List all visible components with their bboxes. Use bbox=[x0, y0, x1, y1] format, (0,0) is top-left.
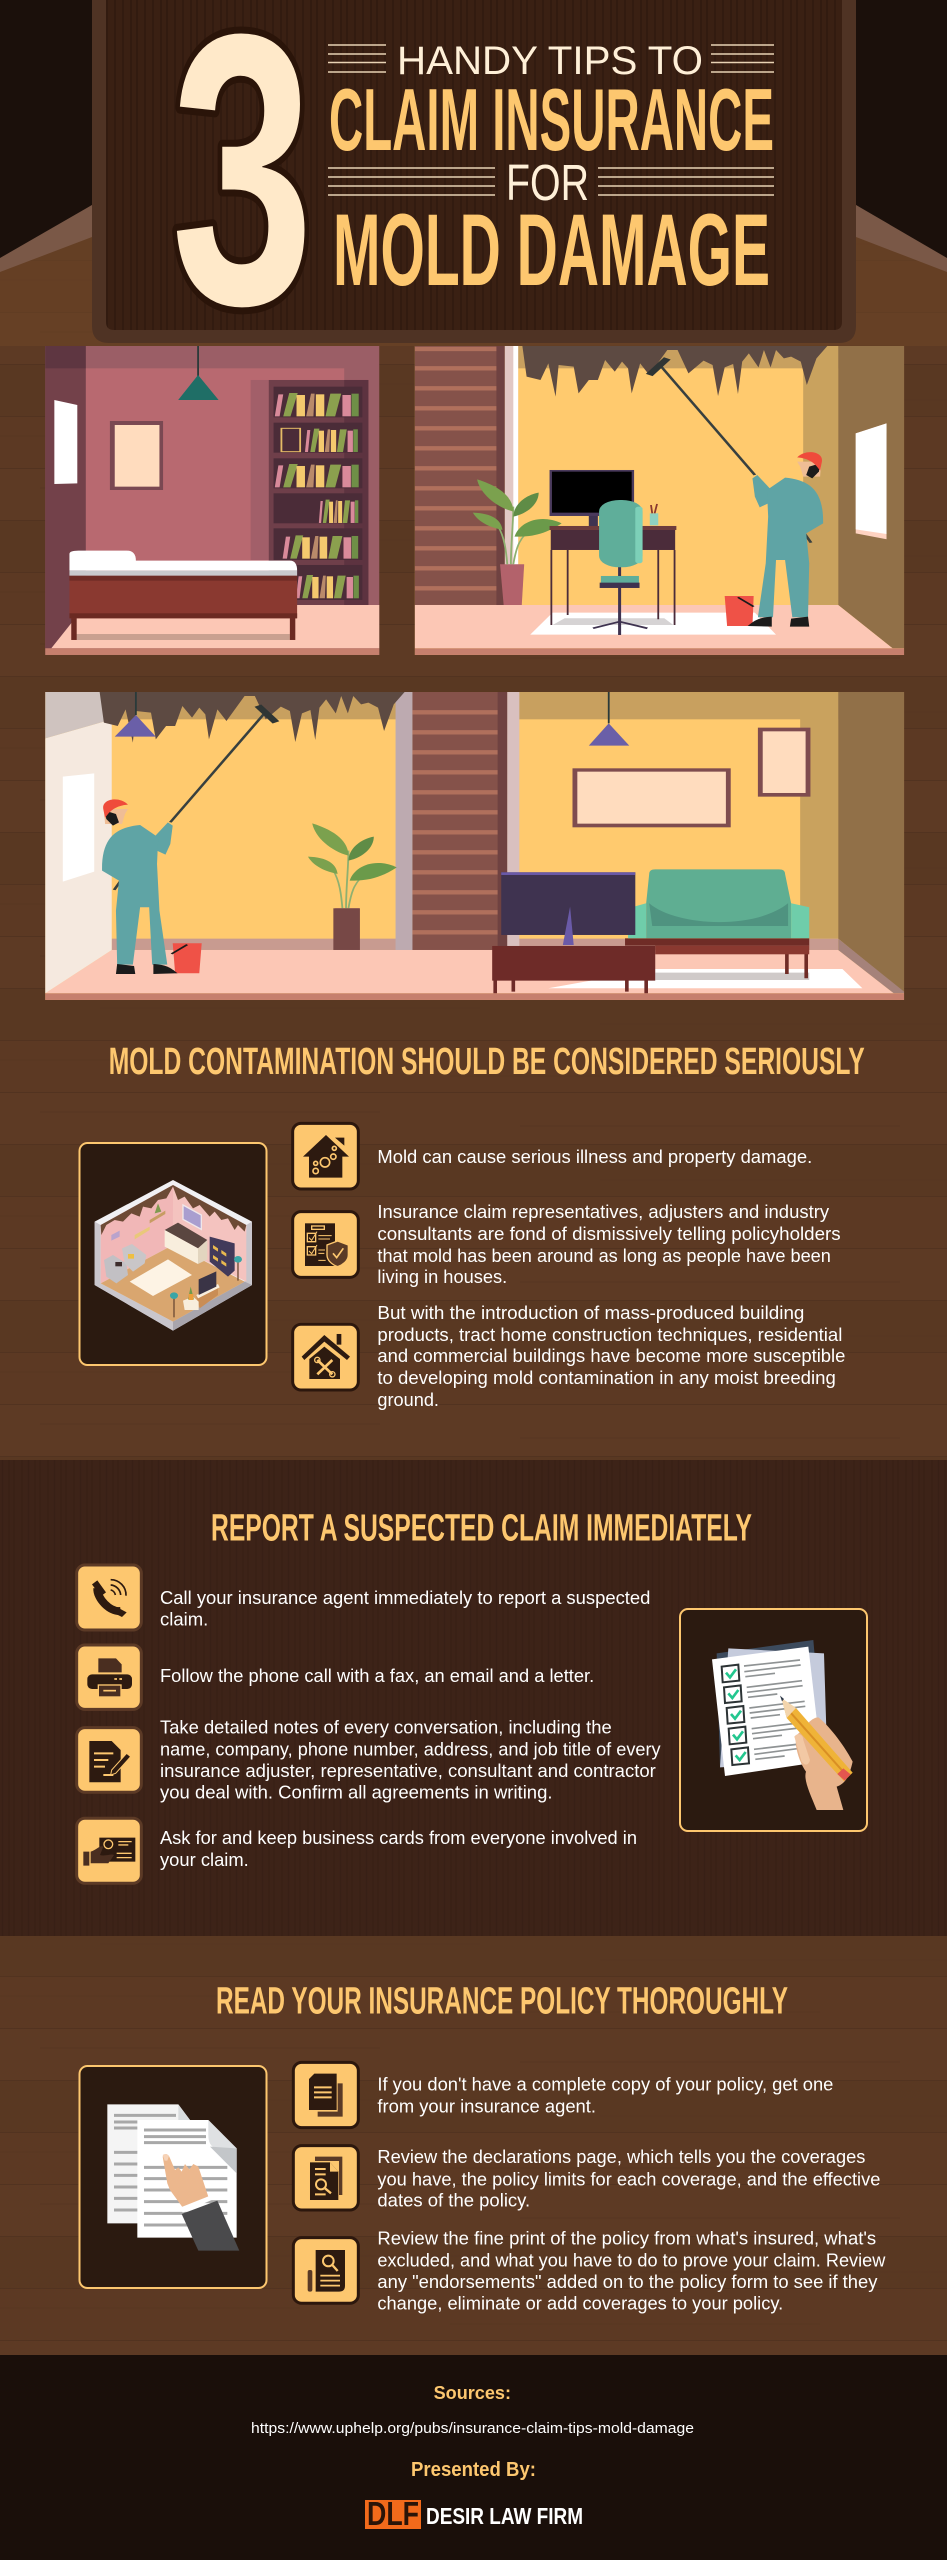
text: section 2: Ask for and keep business cards from everyone involved in bbox=[160, 1828, 637, 1848]
rug bbox=[530, 613, 776, 635]
logo: Desir Law Firm bbox=[365, 2495, 583, 2532]
text: section 2: your claim. bbox=[160, 1850, 249, 1870]
lamp bbox=[178, 346, 219, 400]
text: section 3: you have, the policy limits for each coverage, and the effective bbox=[377, 2169, 880, 2189]
illustration: checklist with pencil and hand bbox=[712, 1640, 853, 1810]
text: section 1: and commercial buildings have become more susceptible bbox=[377, 1346, 845, 1366]
text: section 1: products, tract home construction techniques, residential bbox=[377, 1325, 842, 1345]
footer: sources: Presented By: bbox=[411, 2459, 536, 2481]
logo: Desir Law Firm: DESIR LAW FIRM bbox=[426, 2503, 583, 2529]
illustration: office with worker bbox=[415, 346, 904, 655]
icons: section 1 bbox=[293, 1123, 358, 1390]
text: section 2: insurance adjuster, representative, consultant and contractor bbox=[160, 1761, 656, 1781]
footer: sources bbox=[251, 2383, 694, 2481]
ceiling mold bbox=[100, 692, 405, 743]
icon: moldy house bbox=[293, 1123, 358, 1189]
worker with roller bbox=[649, 358, 823, 627]
icon: fine print search bbox=[293, 2238, 358, 2303]
sofa bbox=[625, 869, 809, 978]
lamp right bbox=[589, 692, 629, 746]
text: section 3: If you don't have a complete copy of your policy, get one bbox=[377, 2075, 833, 2095]
icons: section 2 bbox=[77, 1565, 141, 1883]
icon: house and tools bbox=[293, 1324, 358, 1390]
bed bbox=[69, 551, 297, 640]
panel: isometric room bbox=[80, 1143, 266, 1365]
text: section 1: to developing mold contamination in any moist breeding bbox=[377, 1368, 836, 1388]
icon: checklist and shield bbox=[293, 1212, 358, 1277]
text: section 1: But with the introduction of mass-produced building bbox=[377, 1303, 804, 1323]
title line: for bbox=[328, 154, 774, 211]
text: section 3: excluded, and what you have to do to prove your claim. Review bbox=[377, 2250, 886, 2270]
icon: notes and pen bbox=[77, 1728, 141, 1792]
text: section 2: name, company, phone number, address, and job title of every bbox=[160, 1739, 661, 1759]
text: section 1: consultants are fond of dismissively telling policyholders bbox=[377, 1224, 841, 1244]
bookcase bbox=[251, 380, 368, 605]
window bbox=[856, 423, 887, 539]
tv on cabinet bbox=[492, 872, 655, 993]
text: section 3: change, eliminate or add coverages to your policy. bbox=[377, 2294, 783, 2314]
text: section 1: Insurance claim representatives, adjusters and industry bbox=[377, 1202, 829, 1222]
icon: declarations search bbox=[293, 2146, 358, 2210]
header board bbox=[92, 0, 856, 385]
illustration: isometric moldy room bbox=[95, 1180, 252, 1331]
text: section 3: Review the declarations page, which tells you the coverages bbox=[377, 2147, 865, 2167]
plant bbox=[473, 479, 562, 605]
text: section 2: Call your insurance agent immediately to report a suspected bbox=[160, 1588, 650, 1608]
text: section 1: living in houses. bbox=[377, 1267, 507, 1287]
title line: handy tips to: HANDY TIPS TO bbox=[397, 39, 703, 83]
text: section 2: Take detailed notes of every conversation, including the bbox=[160, 1718, 612, 1738]
text: section 2: you deal with. Confirm all agreements in writing. bbox=[160, 1783, 552, 1803]
title line: for: FOR bbox=[506, 154, 589, 211]
lamp left bbox=[115, 692, 156, 737]
ceiling mold bbox=[522, 346, 827, 397]
text: section 3 bbox=[377, 2075, 886, 2314]
bucket bbox=[725, 596, 754, 626]
rug bbox=[548, 969, 862, 988]
panel: checklist bbox=[680, 1609, 867, 1831]
icon: business card bbox=[77, 1818, 141, 1883]
text: section 2 bbox=[160, 1588, 661, 1870]
bucket bbox=[172, 943, 202, 973]
icon: fax printer bbox=[77, 1645, 141, 1709]
illustration: documents and pointing hand bbox=[107, 2104, 239, 2251]
brick pillar bbox=[396, 692, 519, 950]
desk and monitor bbox=[550, 470, 676, 625]
icon: phone bbox=[77, 1565, 141, 1630]
wall frames bbox=[572, 728, 810, 827]
title line: handy tips to bbox=[328, 39, 774, 83]
panel: documents bbox=[80, 2066, 266, 2288]
text: section 1: that mold has been around as long as people have been bbox=[377, 1246, 831, 1266]
text: section 3: from your insurance agent. bbox=[377, 2096, 596, 2116]
footer: sources: Sources: bbox=[434, 2383, 511, 2403]
text: section 3: Review the fine print of the policy from what's insured, what's bbox=[377, 2228, 876, 2248]
logo: Desir Law Firm: DLF bbox=[367, 2495, 419, 2532]
icon: document copy bbox=[293, 2062, 358, 2128]
footer: sources: https://www.uphelp.org/pubs/insurance-claim-tips-mold-damage bbox=[251, 2420, 694, 2437]
plant bbox=[308, 823, 397, 950]
illustration: living room with worker bbox=[45, 692, 904, 1000]
text: section 3: any "endorsements" added on to the policy form to see if they bbox=[377, 2272, 877, 2292]
worker with roller bbox=[102, 706, 276, 974]
dark walls behind header bbox=[0, 0, 947, 272]
brick pillar bbox=[415, 346, 518, 605]
text: section 2: Follow the phone call with a fax, an email and a letter. bbox=[160, 1666, 594, 1686]
text: section 3: dates of the policy. bbox=[377, 2191, 530, 2211]
office chair bbox=[593, 500, 647, 635]
text: section 1: Mold can cause serious illness and property damage. bbox=[377, 1147, 812, 1167]
illustration: bedroom bbox=[45, 346, 379, 655]
text: section 1: ground. bbox=[377, 1390, 439, 1410]
icons: section 3 bbox=[293, 2062, 358, 2303]
text: section 2: claim. bbox=[160, 1610, 208, 1630]
text: section 1 bbox=[377, 1147, 845, 1410]
